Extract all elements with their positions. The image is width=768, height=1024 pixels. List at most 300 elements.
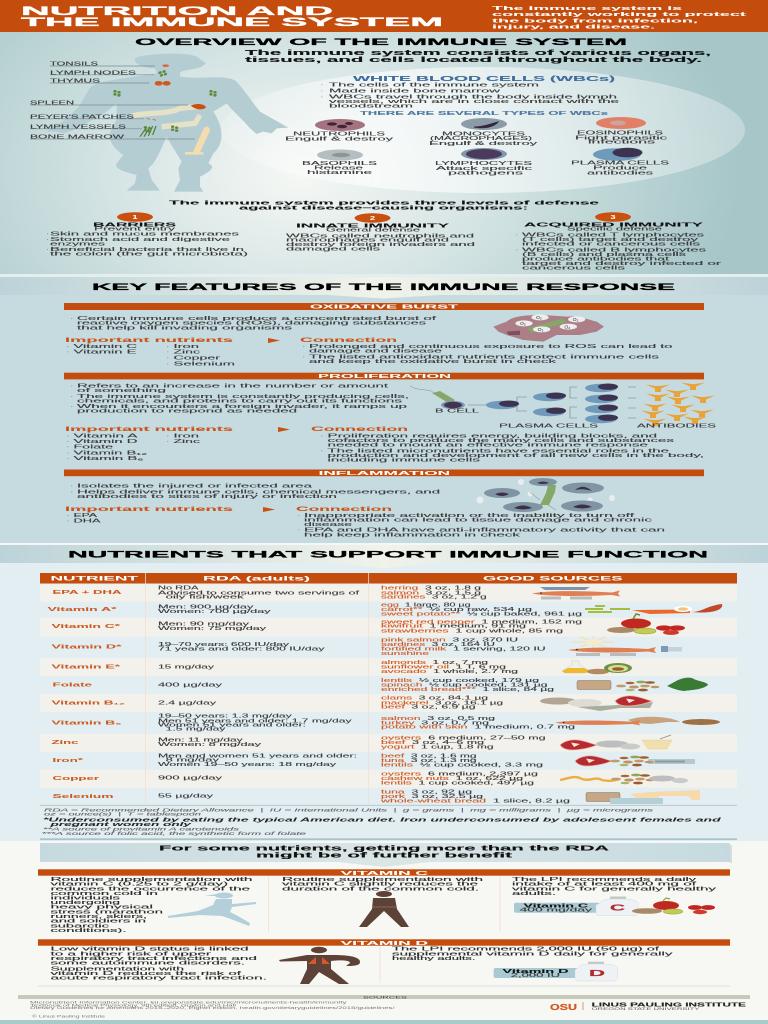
text: oxidative burst description	[71, 316, 438, 331]
subheading: types of WBCs: THERE ARE SEVERAL TYPES OF WBCs	[360, 111, 608, 117]
footnotes: pregnant women only	[48, 822, 193, 828]
row: Vitamin B12: mackerel 3 oz, 16.1 µg	[381, 700, 503, 706]
text: proliferation description: ·	[71, 394, 73, 400]
heading banner: further benefit: might be of further benefit	[256, 852, 514, 859]
column: acquired immunity: 3	[610, 215, 616, 221]
heading: overview: OVERVIEW OF THE IMMUNE SYSTEM	[135, 36, 628, 47]
row: Vitamin C	[52, 614, 685, 635]
table header: NUTRIENT	[50, 576, 139, 583]
column: acquired immunity: ACQUIRED IMMUNITY	[524, 223, 704, 229]
heading banner: nutrients: NUTRIENTS THAT SUPPORT IMMUNE FUNCTION	[68, 548, 709, 559]
text: WBC bullets: bloodstream	[329, 103, 413, 109]
row: Vitamin A: Men: 900 µg/day	[158, 605, 255, 611]
text: connection, inflammation: ·	[298, 528, 300, 534]
text: vitamin C column 2	[282, 877, 483, 892]
list: important nutrients, oxidative burst: Important nutrients	[65, 337, 235, 344]
diagram: B cell to plasma cells to antibodies	[410, 382, 718, 429]
column: innate immunity: WBCs called neutrophils and	[286, 233, 475, 239]
list: important nutrients, proliferation: Iron	[174, 433, 200, 439]
text: proliferation description: Refers to an increase in the number or amount	[77, 383, 390, 389]
cell: neutrophils: Engulf & destroy	[285, 137, 394, 143]
text: vitamin D right column	[392, 947, 673, 962]
column: barriers: BARRIERS	[93, 223, 177, 229]
intro text: tissues, and cells located throughout the body.	[245, 57, 702, 64]
text: connection, proliferation: cofactors to produce the many cells and substances	[328, 438, 675, 444]
sources: SOURCES	[363, 996, 407, 1000]
row: Iron: Women 19–50 years: 18 mg/day	[158, 762, 337, 768]
text: proliferation description: The immune system is constantly producing cells,	[77, 394, 409, 400]
ellipse: white blood cells backdrop	[221, 67, 745, 193]
list: important nutrients, proliferation	[65, 426, 235, 462]
row: Vitamin C: strawberries 1 cup whole, 85 mg	[381, 628, 564, 634]
sources: Dietary Guidelines for Americans 2015–2020, Eighth edition, health.gov/dietaryguidelines/2015/guidelines/	[30, 1006, 395, 1010]
column: barriers: Skin and mucus membranes	[50, 232, 240, 238]
row: Selenium: tuna 3 oz, 92 µg	[381, 790, 473, 796]
row: EPA + DHA: EPA + DHA	[52, 590, 122, 596]
row: Vitamin B6: salmon 3 oz, 0.5 mg	[381, 716, 496, 722]
column: acquired immunity: infected or cancerous cells	[522, 242, 701, 248]
text: inflammation description: ·	[71, 484, 73, 490]
panel: more than the RDA	[38, 843, 732, 986]
header intro text: The immune system is	[492, 6, 682, 12]
text: vitamin D right column: The LPI recommends 2,000 IU (50 µg) of	[392, 947, 660, 953]
row: Vitamin B6: Women 51 years and older:	[158, 723, 306, 729]
callout: vitamin C supplement: Vitamin C	[524, 904, 588, 910]
callout: vitamin D supplement	[494, 962, 618, 981]
text: WBC bullets: Made inside bone marrow	[329, 89, 501, 95]
column: innate immunity: INNATE IMMUNITY	[296, 223, 450, 229]
cell: basophils: BASOPHILS	[302, 161, 379, 167]
header intro text: injury, and disease.	[492, 24, 656, 30]
footnotes: **A source of provitamin A carotenoids	[43, 826, 241, 831]
text: vitamin C column 1: conditions).	[50, 928, 128, 934]
row: Copper: lentils 1 cup cooked, 497 µg	[381, 781, 535, 787]
row: Vitamin B6: potato with skin 1 medium, 0.7 mg	[381, 725, 576, 731]
heading banner: further benefit	[40, 843, 732, 867]
row: Vitamin B12: clams 3 oz, 84.1 µg	[381, 696, 489, 702]
row: Iron: Men and women 51 years and older:	[158, 754, 357, 760]
row: Vitamin A	[48, 602, 722, 617]
logo: OSU Linus Pauling Institute	[550, 1002, 748, 1012]
organ labels	[30, 62, 195, 141]
cell: basophils	[302, 150, 379, 176]
text: vitamin C column 1: and soldiers in	[50, 919, 146, 925]
row: Iron	[52, 754, 695, 769]
subpanel: oxidative burst: OXIDATIVE BURST	[310, 305, 460, 311]
text: vitamin D left column: to a higher risk of upper	[50, 951, 211, 957]
list: important nutrients, oxidative burst: Selenium	[174, 361, 235, 367]
text: vitamin C column 3: The LPI recommends a daily	[512, 877, 697, 883]
arrow	[278, 427, 290, 432]
row: Folate: spinach ½ cup cooked, 131 µg	[381, 681, 548, 688]
column: acquired immunity	[516, 212, 722, 271]
cell: plasma cells	[571, 148, 671, 176]
text: inflammation description	[71, 484, 441, 500]
table header: GOOD SOURCES	[483, 576, 622, 583]
text: oxidative burst description: reactive oxygen species (ROS), damaging substances	[77, 321, 427, 327]
icon: person with a cold	[359, 891, 409, 927]
text: vitamin C column 3: adults.	[512, 891, 557, 897]
arrow	[268, 338, 280, 343]
list: important nutrients, inflammation	[65, 506, 235, 525]
text: connection, proliferation: ·	[321, 433, 323, 439]
text: vitamin C column 2: vitamin C slightly reduces the	[282, 882, 478, 888]
table header	[40, 573, 737, 584]
text: connection, inflammation: inflammation can lead to tissue damage and chronic	[304, 518, 653, 524]
text: vitamin C column 1: stress (marathon	[50, 909, 163, 915]
row: EPA + DHA: oily fish/week	[166, 594, 245, 600]
text: connection, inflammation: EPA and DHA have anti-inflammatory activity that can	[304, 528, 666, 534]
row: Selenium: Selenium	[52, 794, 114, 800]
sources: Textbook of Medical Physiology, 9th edition, Guyton and Hall	[30, 1003, 237, 1007]
text: three levels of defense: The immune system provides three levels of defense	[169, 200, 599, 206]
text: connection, oxidative burst	[300, 337, 673, 365]
row: Vitamin E: avocado 1 whole, 2.7 mg	[381, 669, 519, 675]
cell: monocytes	[429, 118, 538, 147]
row: Vitamin D: sardines 3 oz, 164 IU	[381, 642, 496, 648]
text: vitamin C column 1: subarctic	[50, 923, 110, 929]
cell: lymphocytes: pathogens	[448, 170, 525, 176]
column: acquired immunity: WBCs called B lymphocytes	[522, 248, 707, 254]
text: connection, inflammation: help keep inflammation in check	[304, 532, 521, 538]
table header: RDA (adults)	[203, 576, 310, 583]
heading banner: key features: KEY FEATURES OF THE IMMUNE RESPONSE	[92, 281, 675, 292]
row: Copper: cashew nuts 1 oz, 622 µg	[381, 776, 524, 782]
column: innate immunity	[286, 213, 476, 253]
cell: eosinophils	[575, 117, 668, 146]
subpanel: proliferation: PROLIFERATION	[318, 374, 451, 380]
list: important nutrients, proliferation: ·	[67, 456, 69, 462]
list: important nutrients, oxidative burst: ·	[167, 344, 169, 350]
column: barriers: ·	[46, 232, 48, 238]
row: Copper	[52, 772, 688, 787]
row: Vitamin D: pink salmon 3 oz, 370 IU	[381, 638, 519, 644]
list: important nutrients, proliferation: ·	[67, 450, 69, 456]
text: vitamin C column 1: Routine supplementation with	[50, 877, 252, 883]
text: inflammation description: Isolates the injured or infected area	[77, 484, 313, 490]
title: NUTRITION AND	[21, 6, 333, 18]
text: connection, proliferation: including immune cells	[328, 457, 481, 463]
cell: neutrophils	[285, 119, 394, 143]
text: inflammation description: ·	[71, 489, 73, 495]
column: barriers: ·	[46, 247, 48, 253]
row: Vitamin B6	[52, 714, 720, 733]
text: proliferation description: When it encounters a foreign invader, it ramps up	[77, 404, 408, 410]
callout: vitamin C supplement	[514, 896, 715, 916]
row: Zinc: Women: 8 mg/day	[158, 742, 262, 748]
list: important nutrients, oxidative burst: ·	[167, 361, 169, 367]
cell: basophils: histamine	[307, 170, 373, 176]
icon: person with lungs	[279, 947, 360, 984]
text: vitamin D left column: respiratory tract infections and	[50, 956, 257, 962]
icon: oxidative burst cell	[493, 314, 604, 342]
list: important nutrients, oxidative burst: Iron	[174, 344, 200, 350]
footnotes: *Underconsumed by eating the typical American diet. Iron underconsumed by adolescent females and	[43, 818, 722, 824]
column: acquired immunity: produce antibodies that	[522, 256, 671, 262]
text: connection, proliferation: Connection	[311, 426, 409, 433]
subpanel: vitamin D: VITAMIN D	[341, 941, 428, 947]
row: Zinc: beef 3 oz, 4–6 mg	[381, 740, 485, 746]
text: vitamin D right column: supplemental vitamin D daily for generally	[392, 951, 673, 957]
row: Vitamin E: Vitamin E*	[52, 665, 123, 671]
subpanel: proliferation	[64, 373, 718, 463]
text: vitamin D left column: Low vitamin D status is linked	[50, 947, 248, 953]
text: connection, oxidative burst: Prolonged and continuous exposure to ROS can lead to	[309, 344, 673, 350]
row: Vitamin A: carrot** ½ cup raw, 534 µg	[381, 606, 533, 613]
list: important nutrients, proliferation: ·	[167, 439, 169, 445]
row: Folate: lentils ½ cup cooked, 179 µg	[381, 677, 540, 684]
row: Folate: Folate	[52, 683, 92, 689]
title	[21, 6, 443, 29]
text: inflammation description: antibodies to sites of injury or infection	[77, 494, 338, 500]
text: vitamin D left column: acute respiratory tract infection.	[50, 976, 268, 982]
list: important nutrients, oxidative burst: ·	[67, 350, 69, 356]
list: important nutrients, proliferation: Vitamin D	[74, 439, 139, 445]
column: innate immunity: General defense	[326, 227, 421, 233]
icon: oxidative burst cell: O₂	[573, 317, 579, 323]
row: Vitamin E: sunflower oil 1 T, 6 mg	[381, 664, 507, 670]
organ labels: PEYER'S PATCHES	[30, 114, 135, 120]
row: Vitamin D: Vitamin D*	[52, 644, 124, 650]
text: vitamin D left column	[50, 947, 268, 982]
row: EPA + DHA: salmon 3 oz, 1.5 g	[381, 590, 481, 596]
row: Vitamin B6: Men 51 years and older: 1.7 mg/day	[158, 718, 353, 724]
sources	[18, 995, 750, 1018]
row: EPA + DHA: herring 3 oz, 1.8 g	[381, 586, 481, 592]
cell: basophils: Release	[314, 166, 364, 172]
row: Vitamin C: kiwifruit 1 medium, 91 mg	[381, 624, 527, 630]
column: barriers: the colon (the gut microbiota)	[50, 252, 249, 258]
row: Copper: Copper	[52, 776, 99, 782]
row: Vitamin C: Women: 75 mg/day	[158, 626, 267, 632]
organ labels: TONSILS	[50, 62, 99, 68]
text: WBC bullets: ·	[321, 83, 323, 89]
column: innate immunity: damaged cells	[286, 247, 381, 253]
row: Vitamin B6: turkey 3 oz, 0.7 mg	[381, 720, 490, 726]
row: Zinc: Men: 11 mg/day	[158, 738, 244, 744]
text: vitamin C column 3	[512, 877, 717, 897]
diagram: B cell to plasma cells to antibodies: B CELL	[435, 409, 480, 415]
row: Folate: enriched bread*** 1 slice, 84 µg	[381, 687, 555, 693]
diagram: B cell to plasma cells to antibodies: PLASMA CELLS	[499, 423, 600, 429]
cell: eosinophils: infections	[588, 140, 657, 146]
row: Zinc: oysters 6 medium, 27–50 mg	[381, 736, 546, 742]
text: vitamin C column 1: heavy physical	[50, 905, 153, 911]
header intro text	[492, 6, 746, 30]
text: vitamin D right column: healthy adults.	[392, 956, 477, 962]
panel: key features of the immune response	[0, 274, 768, 544]
list: important nutrients, proliferation: Vitamin B₁₂	[74, 450, 147, 456]
text: vitamin C column 1: common cold in	[50, 891, 158, 897]
cell: neutrophils: NEUTROPHILS	[293, 132, 387, 138]
list: important nutrients, proliferation: ·	[67, 439, 69, 445]
panel: nutrients that support immune function	[0, 543, 768, 841]
cell: monocytes: MONOCYTES	[442, 132, 527, 138]
list: important nutrients, proliferation: ·	[67, 433, 69, 439]
table: nutrients	[40, 573, 737, 805]
text: vitamin C column 1: reduces the occurrence of the	[50, 886, 250, 892]
footnotes	[40, 808, 737, 840]
row: Vitamin A: sweet potato** ⅓ cup baked, 961 µg	[381, 611, 583, 617]
text: vitamin C column 3: vitamin C for generally healthy	[512, 886, 717, 892]
row: EPA + DHA: Advised to consume two servings of	[158, 590, 361, 596]
row: Vitamin E	[52, 660, 632, 675]
subpanel: vitamin D	[38, 939, 730, 986]
text: proliferation description: production to respond as needed	[77, 409, 298, 415]
column: barriers: ·	[46, 237, 48, 243]
column: barriers: 1	[132, 215, 138, 221]
list: important nutrients, proliferation: Important nutrients	[65, 426, 235, 433]
organ labels: LYMPH NODES	[50, 70, 138, 76]
list: important nutrients, oxidative burst: Vitamin C	[74, 344, 138, 350]
row: Vitamin C: sweet red pepper 1 medium, 152 mg	[381, 619, 583, 625]
row: Vitamin A: egg 1 large, 80 µg	[381, 602, 471, 608]
row: Vitamin B12: Vitamin B₁₂	[52, 701, 127, 707]
row: Vitamin C: Vitamin C*	[52, 624, 123, 630]
column: innate immunity: macrophages engulf and	[286, 238, 450, 244]
callout: vitamin D supplement: D	[589, 969, 606, 978]
text: proliferation description: ·	[71, 383, 73, 389]
text: WBC bullets: ·	[321, 95, 323, 101]
row: Zinc: yogurt 1 cup, 1.8 mg	[381, 745, 494, 751]
column: barriers: Beneficial bacteria that live in	[50, 247, 245, 253]
text: connection, oxidative burst: Connection	[300, 337, 398, 344]
heading: white blood cells: WHITE BLOOD CELLS (WBCs)	[353, 76, 615, 83]
text: oxidative burst description: Certain immune cells produce a concentrated burst of	[77, 316, 438, 322]
row: Vitamin D: 71 years and older: 800 IU/day	[158, 646, 326, 652]
list: important nutrients, oxidative burst: ·	[167, 356, 169, 362]
row: Copper: oysters 6 medium, 2,397 µg	[381, 772, 539, 778]
sources: © Linus Pauling Institute	[32, 1014, 105, 1018]
icon: runner	[168, 892, 256, 926]
text: connection, proliferation	[311, 426, 704, 463]
cell: monocytes: (MACROPHAGES)	[430, 136, 533, 142]
row: EPA + DHA: No RDA	[158, 586, 200, 592]
text: proliferation description	[71, 383, 409, 415]
text: proliferation description: of something	[77, 388, 167, 394]
list: important nutrients, inflammation: ·	[67, 513, 69, 519]
row: Vitamin B6: 1.5 mg/day	[166, 727, 227, 733]
list: important nutrients, inflammation: ·	[67, 519, 69, 525]
row: Iron: Iron*	[52, 758, 85, 764]
header intro text: constantly working to protect	[492, 12, 746, 18]
icon: oxidative burst cell: O₂	[536, 315, 542, 321]
text: WBC bullets: vessels, which are in close contact with the	[329, 99, 620, 105]
heading banner: nutrients	[0, 545, 768, 568]
intro text	[245, 50, 711, 64]
row: Selenium: pork 3 oz, 32.5 µg	[381, 794, 484, 800]
callout: vitamin C supplement: C	[610, 904, 626, 912]
text: connection, inflammation: ·	[298, 513, 300, 519]
subpanel: oxidative burst	[64, 303, 704, 367]
column: innate immunity: 2	[370, 216, 375, 222]
list: important nutrients, inflammation: Important nutrients	[65, 506, 235, 513]
icon: inflammation cells	[476, 478, 615, 512]
text: three levels of defense: against disease–causing organisms:	[239, 206, 528, 212]
text: vitamin D left column: vitamin D reduces the risk of	[50, 971, 242, 977]
icon: oxidative burst cell: O₂	[538, 327, 544, 333]
subpanel: vitamin C: VITAMIN C	[341, 871, 428, 877]
callout: vitamin D supplement: Vitamin D	[502, 969, 568, 975]
row: Zinc	[52, 735, 672, 751]
text: vitamin C column 1: undergoing	[50, 900, 120, 906]
text: oxidative burst description: that help kill invading organisms	[77, 325, 294, 331]
row: Vitamin A: Vitamin A*	[48, 607, 119, 613]
subpanel: inflammation: INFLAMMATION	[319, 471, 450, 477]
text: connection, oxidative burst: ·	[303, 344, 305, 350]
organ labels: BONE MARROW	[30, 135, 125, 141]
text: connection, inflammation: Inappropriate activation or the inability to turn off	[304, 513, 636, 519]
text: connection, inflammation: Connection	[296, 506, 393, 513]
text: WBC bullets: WBCs travel through the body inside lymph	[329, 95, 618, 101]
organ labels: SPLEEN	[30, 101, 75, 107]
bottom band	[0, 1020, 768, 1024]
header intro text: the body from infection,	[492, 18, 699, 24]
cell: monocytes: Engulf & destroy	[429, 141, 538, 147]
row: Selenium: 55 µg/day	[158, 794, 214, 800]
row: Folate	[52, 677, 708, 693]
text: vitamin C column 2: duration of the common cold.	[282, 886, 480, 892]
row: Vitamin D: sunshine	[381, 651, 430, 657]
column: acquired immunity: (T cells) target and destroy	[522, 237, 699, 243]
list: important nutrients, inflammation: DHA	[74, 519, 102, 525]
text: connection, oxidative burst: and keep the oxidative burst in check	[309, 359, 557, 365]
list: important nutrients, oxidative burst: Zinc	[174, 350, 201, 356]
list: important nutrients, proliferation: Vitamin A	[74, 433, 140, 439]
column: acquired immunity: Specific defense	[567, 227, 663, 233]
row: Vitamin C: Men: 90 mg/day	[158, 622, 250, 628]
row: Folate: 400 µg/day	[158, 682, 223, 688]
column: acquired immunity: target and destroy infected or	[522, 261, 722, 267]
text: vitamin C column 1: individuals	[50, 896, 121, 902]
callout: vitamin C supplement: 400 mg/day	[520, 908, 593, 914]
diagram: B cell to plasma cells to antibodies: ANTIBODIES	[637, 423, 718, 429]
list: important nutrients, inflammation: EPA	[74, 513, 99, 519]
logo: OSU Linus Pauling Institute: OREGON STATE UNIVERSITY	[592, 1007, 702, 1011]
subpanel: inflammation	[64, 470, 704, 538]
list: important nutrients, oxidative burst	[65, 337, 235, 367]
text: connection, oxidative burst: ·	[303, 354, 305, 360]
text: vitamin C column 2: Routine supplementation with	[282, 877, 483, 883]
list: important nutrients, oxidative burst: ·	[167, 350, 169, 356]
logo: OSU Linus Pauling Institute: LINUS PAULING INSTITUTE	[592, 1003, 748, 1009]
figure: body silhouette with organs	[47, 54, 288, 192]
text: connection, proliferation: Proliferation requires energy, building blocks, and	[328, 433, 658, 439]
text: vitamin C column 1	[50, 877, 252, 934]
row: Copper: 900 µg/day	[158, 776, 223, 782]
row: Zinc: Zinc	[52, 740, 79, 746]
column: barriers	[46, 212, 249, 258]
row: Iron: lentils ½ cup cooked, 3.3 mg	[381, 762, 544, 769]
text: proliferation description: chemicals, and proteins to carry out its functions	[77, 398, 404, 404]
icon: oxidative burst cell: O₂	[520, 321, 526, 327]
column: acquired immunity: (B cells) and plasma cells	[522, 252, 687, 258]
row: Vitamin B12: 2.4 µg/day	[158, 700, 217, 706]
text: vitamin D left column: Supplementation with	[50, 966, 184, 972]
text: connection, proliferation: needed to mount an effective immune response	[328, 442, 649, 448]
cell: plasma cells: PLASMA CELLS	[571, 161, 671, 167]
text: connection, oxidative burst: damage and disease	[309, 349, 443, 355]
column: acquired immunity: WBCs called T lymphocytes	[522, 233, 705, 239]
subpanel: vitamin C	[38, 869, 730, 934]
list: important nutrients, oxidative burst: Copper	[174, 356, 221, 362]
column: acquired immunity: ·	[516, 248, 518, 254]
row: Vitamin B6: Vitamin B₆	[52, 720, 123, 726]
arrow	[263, 507, 275, 512]
row: Vitamin B6: 19–50 years: 1.3 mg/day	[158, 714, 293, 720]
heading banner: further benefit: For some nutrients, getting more than the RDA	[159, 846, 609, 853]
row: EPA + DHA	[52, 586, 620, 601]
